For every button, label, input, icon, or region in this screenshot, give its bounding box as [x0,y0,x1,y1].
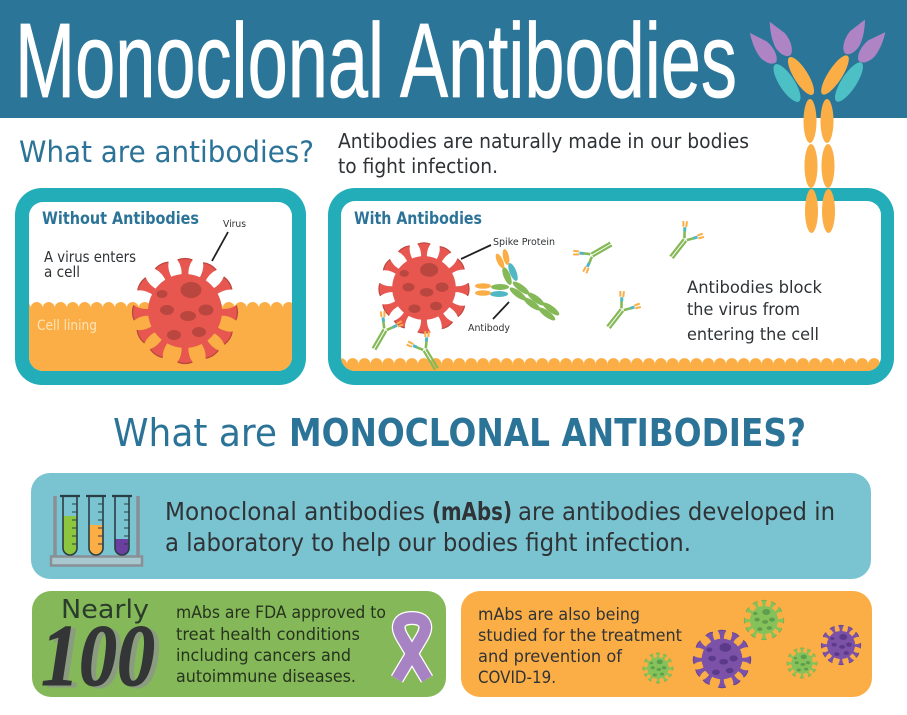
text: COVID-19: COVID-19. [478,668,556,688]
icon: green virus left [643,653,673,683]
text: mAbs definition: (mAbs) [432,497,512,526]
icon: green virus top [744,600,784,640]
text: antibodies block the virus: the virus from [687,300,800,320]
icon: purple virus large [693,630,751,688]
heading: what are antibodies: What are antibodies? [19,135,314,169]
pointer: antibody [493,302,509,319]
text: COVID-19: studied for the treatment [478,626,682,646]
text: mAbs definition: Monoclonal antibodies [165,497,425,526]
number: 100: 100 [46,610,160,707]
virus entering cell [132,258,238,364]
text: FDA approved: mAbs are FDA approved to [176,603,386,623]
cell lining strip [341,358,881,371]
panel: COVID-19 research [461,591,872,697]
header banner [0,0,907,118]
text: a virus enters a cell: a cell [44,263,80,281]
icon: green virus right [787,648,817,678]
number: 100: 100 [41,608,155,705]
panel: mAbs definition [31,473,871,579]
large antibody [475,249,561,322]
label: cell lining: Cell lining [37,318,97,334]
pointer: virus [212,232,228,261]
small antibodies [363,219,705,376]
cell lining [29,302,292,371]
panel: with antibodies [328,188,894,385]
text: COVID-19: and prevention of [478,647,623,667]
intro text: Antibodies are naturally made in our bodies [338,129,749,153]
label: spike protein: Spike Protein [493,237,555,248]
text: COVID-19: mAbs are also being [478,605,640,625]
icon: test tubes in rack [51,496,142,566]
pointer: spike protein [461,245,491,259]
icon: awareness ribbon [397,618,427,679]
label: virus: Virus [223,219,246,230]
text: FDA approved: treat health conditions [176,625,360,645]
heading: what are monoclonal antibodies: MONOCLONAL ANTIBODIES? [289,411,806,455]
text: mAbs definition: are antibodies developed in [518,497,835,526]
icon: purple virus small [821,625,861,665]
intro text: to fight infection. [338,154,498,178]
text: FDA approved: autoimmune diseases. [176,667,356,687]
text: nearly: Nearly [61,595,149,625]
text: a virus enters a cell: A virus enters [44,248,136,266]
label: with antibodies: With Antibodies [354,209,482,229]
label: without antibodies: Without Antibodies [42,209,199,229]
heading: what are monoclonal antibodies: What are [113,411,277,455]
text: antibodies block the virus: entering the cell [687,325,819,345]
panel: without antibodies [15,188,306,385]
text: antibodies block the virus: Antibodies block [687,278,822,298]
text: FDA approved: including cancers and [176,646,351,666]
text: mAbs definition: a laboratory to help our bodies fight infection. [165,528,691,557]
panel: FDA approved [32,591,446,707]
virus with spike proteins [379,243,469,333]
icon: header antibody [744,16,891,233]
label: antibody: Antibody [468,323,510,334]
